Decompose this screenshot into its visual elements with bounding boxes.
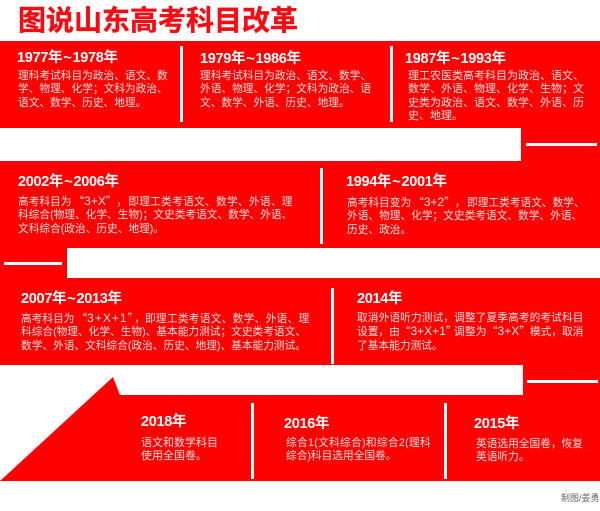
panel: 2018 [141,413,218,462]
text: 高考科目为“3+X”，即理工类考语文、数学、外语、理 [18,194,293,209]
text: 史、地理。 [408,110,463,122]
divider [444,403,447,479]
text [476,438,583,463]
divider [180,46,182,122]
text: 设置，由“3+X+1 调整为“3+X”模式，取消 [357,324,583,339]
text [21,311,309,352]
text: 使用全国卷。 [141,450,207,462]
text: 取消外语听力测试，调整了夏季高考的考试科目 [357,312,584,324]
panel: 1977-1978 [17,49,168,109]
text: 理科考试科目为政治、语文、数学、 [200,70,371,82]
text: 综合1(文科综合)和综合2(理科 [286,437,431,449]
heading: 2018年 [141,414,186,430]
text: 外语、物理、化学；文史类考语文、数学、外语、 [347,210,582,222]
heading: 1977年~1978年 [17,50,118,66]
text: 科综合(物理、化学、生物)、基本能力测试；文史类考语文、 [21,326,306,338]
heading: 2002年~2006年 [18,174,119,190]
heading: 2007年~2013年 [21,291,122,307]
text [141,436,218,462]
panel: 2015 [474,415,583,463]
text: 数学、外语、文科综合(政治、历史、地理)、基本能力测试。 [21,340,306,352]
text [200,70,371,109]
text: 文、数学、外语、历史、地理。 [200,97,350,109]
connector line right 2 [527,380,598,383]
text: 历史、政治。 [347,224,411,236]
divider [250,403,254,479]
heading: 1987年~1993年 [405,51,506,67]
panel: 2007-2013 [21,290,309,352]
heading: 2016年 [284,416,329,432]
divider [330,288,334,364]
text: 语文、数学、历史、地理。 [18,97,146,109]
text [347,195,585,236]
panel: 2002-2006 [18,173,293,235]
text [357,312,584,352]
title: 图说山东高考科目改革 [18,5,298,36]
text: 史类为政治、语文、数学、外语、历 [408,97,584,109]
text [18,194,293,235]
text: 数学、外语、物理、化学、生物；文 [408,83,584,95]
connector line left [4,262,62,265]
text: 综合)科目选用全国卷。 [286,450,396,462]
text: 高考科目为“3+X+1”，即理工类考语文、数学、外语、理 [21,311,309,326]
heading: 2015年 [474,416,519,432]
text: 外语、物理、化学；文科为政治、语 [200,83,371,95]
heading: 1994年~2001年 [346,174,447,190]
panel: 1979-1986 [200,50,371,109]
text: 理工农医类高考科目为政治、语文、 [408,70,584,82]
connector line right 1 [526,143,597,146]
text: 英语选用全国卷，恢复 [476,438,583,450]
panel: 2016 [284,415,431,462]
text [408,70,584,122]
heading: 1979年~1986年 [200,51,301,67]
text [18,70,168,109]
text: 高考科目变为“3+2”，即理工类考语文、数学、 [347,195,585,210]
text: 语文和数学科目 [141,437,218,449]
panel: 1994-2001 [346,173,585,236]
text: 英语听力。 [476,451,529,463]
text: 了基本能力测试。 [357,340,443,352]
panel: 1987-1993 [405,50,584,122]
divider [320,168,322,244]
text: ” [446,324,457,339]
text [286,436,431,462]
text: 文科综合(政治、历史、地理)。 [18,223,164,235]
heading: 2014年 [357,291,402,307]
divider [390,46,393,122]
text: 学、物理、化学；文科为政治、 [18,83,168,95]
text: 理科考试科目为政治、语文、数 [18,70,168,82]
text: 科综合(物理、化学、生物)；文史类考语文、数学、外语、 [18,209,292,221]
credit: 制图/姜勇 [561,493,600,503]
panel: 2014 [357,290,584,352]
